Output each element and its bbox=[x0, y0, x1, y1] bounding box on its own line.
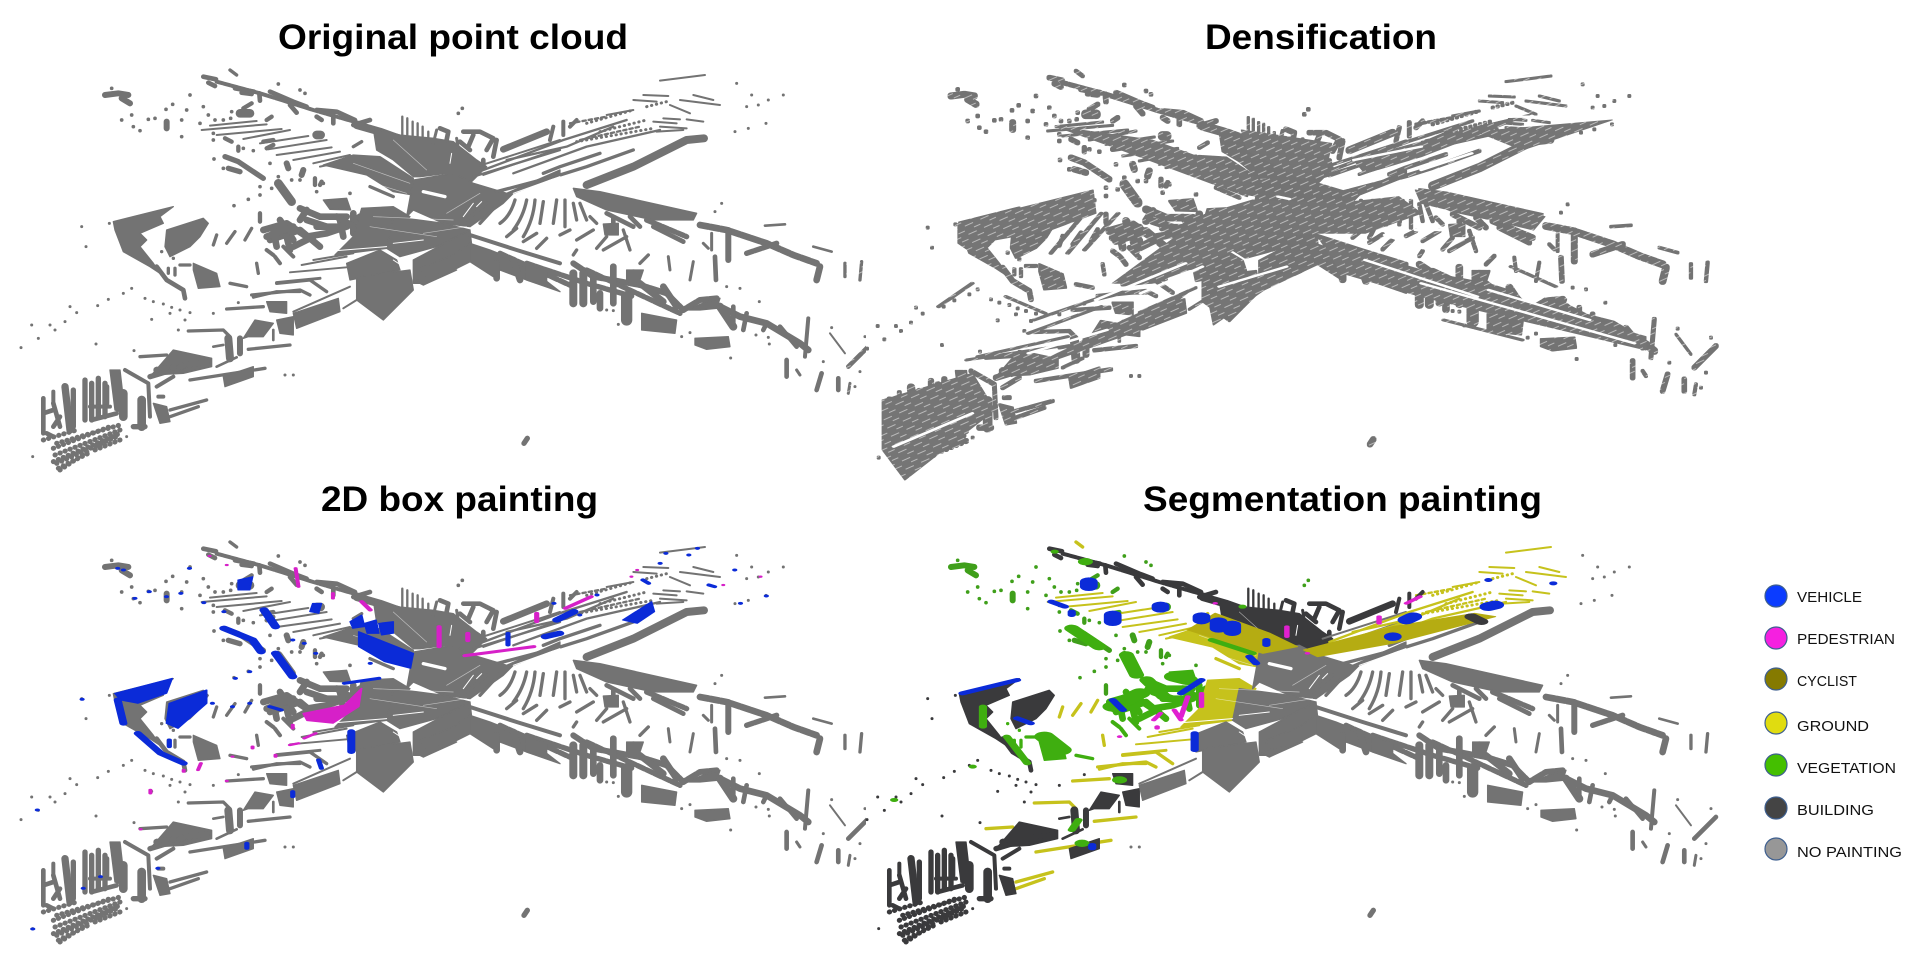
title: 2D box painting: 2D box painting bbox=[321, 480, 598, 519]
legend item: pedestrian: PEDESTRIAN bbox=[1797, 631, 1895, 648]
magenta pedestrian points bbox=[1120, 597, 1420, 737]
blue vehicle points bbox=[962, 580, 1553, 848]
green vegetation blobs bbox=[894, 552, 1253, 843]
legend item: building bbox=[1765, 797, 1874, 819]
base grey cloud bbox=[21, 542, 870, 942]
chart: grey point cloud bbox=[21, 70, 870, 470]
legend item: ground bbox=[1765, 712, 1869, 735]
legend item: vegetation bbox=[1765, 754, 1896, 777]
legend item: cyclist: CYCLIST bbox=[1797, 673, 1857, 690]
vehicle, vegetation and pedestrian overlays bbox=[894, 552, 1553, 848]
legend bbox=[1765, 585, 1902, 861]
chart: point cloud painted by segmentation bbox=[867, 542, 1716, 942]
title: densification: Densification bbox=[1205, 18, 1437, 57]
darker yellow ground wedges bbox=[1188, 613, 1495, 657]
panel: 2D box painting bbox=[21, 480, 870, 942]
legend item: vehicle bbox=[1765, 585, 1862, 607]
legend item: vehicle: VEHICLE bbox=[1797, 589, 1862, 606]
speckle texture over the densified cloud bbox=[846, 61, 1716, 491]
legend item: vegetation: VEGETATION bbox=[1797, 760, 1896, 777]
magenta pedestrian points bbox=[141, 556, 761, 829]
panel: densification bbox=[846, 18, 1716, 491]
legend item: no painting bbox=[1765, 838, 1902, 861]
legend item: cyclist bbox=[1765, 668, 1857, 690]
blue vehicle points bbox=[33, 548, 766, 929]
title: original point cloud: Original point cloud bbox=[278, 18, 628, 57]
panel: original point cloud bbox=[21, 18, 870, 470]
base cloud coloured by class bbox=[867, 542, 1716, 942]
panel: segmentation painting bbox=[867, 480, 1716, 942]
chart: point cloud painted by 2D boxes bbox=[21, 542, 870, 942]
dark building accent bbox=[1471, 617, 1482, 622]
legend item: ground: GROUND bbox=[1797, 718, 1869, 735]
chart: densified grey point cloud bbox=[846, 61, 1716, 491]
legend item: pedestrian bbox=[1765, 627, 1895, 649]
legend item: no painting: NO PAINTING bbox=[1797, 844, 1902, 861]
legend item: building: BUILDING bbox=[1797, 802, 1874, 819]
title: segmentation painting: Segmentation painting bbox=[1143, 480, 1542, 519]
